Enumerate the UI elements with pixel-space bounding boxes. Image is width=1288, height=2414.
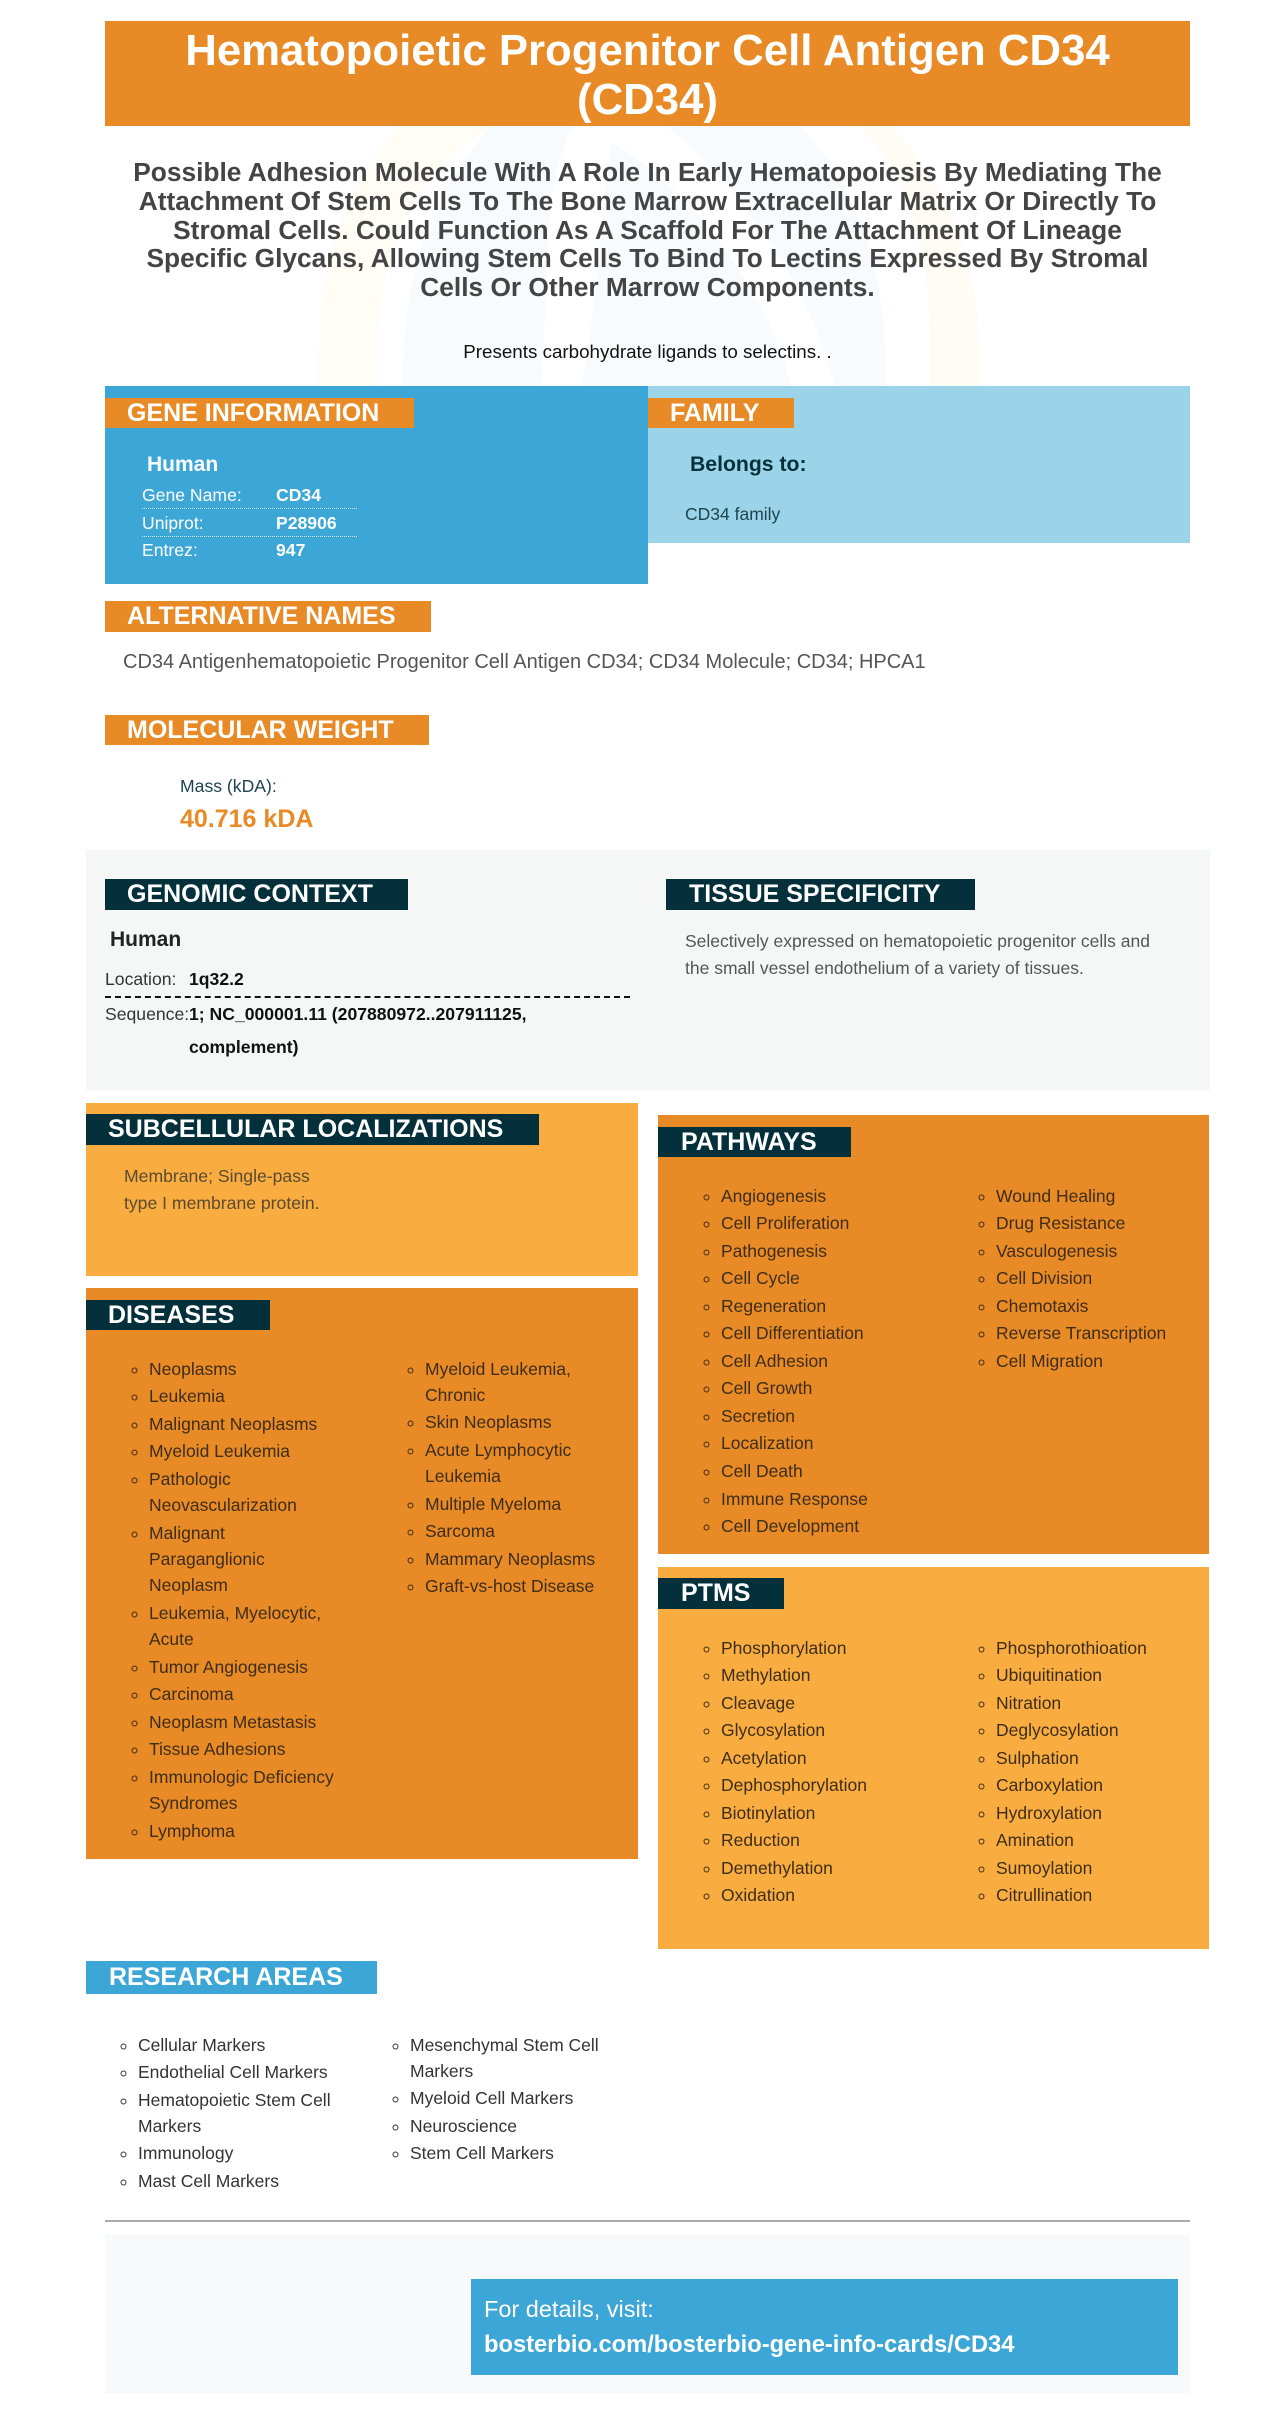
pathways list column 1: Cell Differentiation (721, 1323, 864, 1343)
diseases list column 1: Acute (149, 1629, 194, 1649)
pathways list column 1: Cell Development (721, 1516, 859, 1536)
tissue specificity text: Selectively expressed on hematopoietic progenitor cells and (685, 931, 1150, 951)
diseases list column 1: Paraganglionic (149, 1549, 265, 1569)
panel: footer (105, 2235, 1190, 2393)
sequence row: complement) (189, 1037, 298, 1057)
pathways list column 1: Immune Response (721, 1489, 868, 1509)
heading: ptms: PTMS (681, 1579, 750, 1607)
subtitle description: Specific Glycans, Allowing Stem Cells To Bind To Lectins Expressed By Stromal (147, 243, 1148, 273)
diseases list column 1: Neoplasms (149, 1358, 237, 1378)
diseases list column 1 (132, 1358, 334, 1841)
localization text (124, 1166, 320, 1213)
ptms list column 2: Nitration (996, 1693, 1061, 1713)
subtitle description: Attachment Of Stem Cells To The Bone Marrow Extracellular Matrix Or Directly To (139, 186, 1156, 216)
ptms list column 1: Demethylation (721, 1858, 833, 1878)
ptms list column 1: Cleavage (721, 1693, 795, 1713)
pathways list column 2 (978, 1186, 1166, 1371)
pathways list column 2: Cell Migration (996, 1351, 1103, 1371)
heading: genomic context: GENOMIC CONTEXT (127, 880, 373, 908)
pathways list column 1 (704, 1186, 868, 1536)
pathways list column 1: Regeneration (721, 1296, 826, 1316)
subtitle description: Cells Or Other Marrow Components. (420, 272, 875, 302)
ptms list column 2: Deglycosylation (996, 1720, 1119, 1740)
subtitle description: Stromal Cells. Could Function As A Scaffold For The Attachment Of Lineage (173, 215, 1122, 245)
title banner (105, 21, 1190, 126)
pathways list column 2: Drug Resistance (996, 1213, 1125, 1233)
ptms list column 1: Glycosylation (721, 1720, 825, 1740)
diseases list column 1: Carcinoma (149, 1684, 234, 1704)
species label: Human (147, 453, 218, 476)
ptms list column 2: Sulphation (996, 1748, 1079, 1768)
ptms list column 1: Dephosphorylation (721, 1775, 867, 1795)
ptms list column 1: Biotinylation (721, 1803, 815, 1823)
gene name row (142, 485, 357, 509)
panel: genomic context and tissue specificity: 1q32.2 (189, 969, 244, 989)
ptms list column 1: Acetylation (721, 1748, 807, 1768)
research areas list column 1: Endothelial Cell Markers (138, 2062, 328, 2082)
research areas list column 2: Mesenchymal Stem Cell (410, 2034, 599, 2054)
sequence row: Sequence: (105, 1004, 189, 1024)
callout: details link (471, 2279, 1178, 2375)
diseases list column 1: Malignant Neoplasms (149, 1414, 317, 1434)
alternative names text: CD34 Antigenhematopoietic Progenitor Cell Antigen CD34; CD34 Molecule; CD34; HPCA1 (123, 651, 926, 673)
diseases list column 1: Neoplasm Metastasis (149, 1712, 316, 1732)
details url: bosterbio.com/bosterbio-gene-info-cards/CD34 (484, 2332, 1014, 2358)
research areas list column 1 (120, 2034, 331, 2191)
pathways list column 1: Localization (721, 1433, 813, 1453)
gene name row: Gene Name: (142, 485, 242, 505)
pathways list column 1: Cell Growth (721, 1378, 812, 1398)
dashed divider (105, 996, 630, 998)
mass value: 40.716 kDA (180, 805, 313, 833)
ptms list column 2: Citrullination (996, 1885, 1092, 1905)
pathways list column 1: Cell Cycle (721, 1268, 800, 1288)
heading: molecular weight: MOLECULAR WEIGHT (127, 716, 394, 744)
research areas list column 1: Cellular Markers (138, 2034, 265, 2054)
research areas list column 1: Mast Cell Markers (138, 2171, 279, 2191)
diseases list column 1: Lymphoma (149, 1821, 235, 1841)
for details label: For details, visit: (484, 2296, 654, 2322)
heading: pathways: PATHWAYS (681, 1128, 817, 1156)
diseases list column 1: Leukemia (149, 1386, 225, 1406)
pathways list column 1: Cell Adhesion (721, 1351, 828, 1371)
belongs to label: Belongs to: (690, 453, 807, 476)
ptms list column 2 (978, 1638, 1147, 1905)
tissue specificity text: the small vessel endothelium of a variety of tissues. (685, 958, 1084, 978)
sequence row (105, 1004, 527, 1057)
family value: CD34 family (685, 504, 780, 524)
diseases list column 1: Pathologic (149, 1469, 231, 1489)
ptms list column 2: Ubiquitination (996, 1665, 1102, 1685)
function note: Presents carbohydrate ligands to selectins. . (463, 341, 832, 362)
heading: research areas: RESEARCH AREAS (109, 1963, 343, 1991)
ptms list column 2: Amination (996, 1830, 1074, 1850)
pathways list column 1: Angiogenesis (721, 1186, 826, 1206)
pathways list column 1: Cell Death (721, 1461, 803, 1481)
heading: research areas (86, 1961, 377, 1994)
research areas list column 2: Stem Cell Markers (410, 2143, 554, 2163)
heading: diseases (86, 1300, 270, 1330)
panel: alternative names (105, 601, 926, 673)
research areas list column 1: Immunology (138, 2143, 233, 2163)
heading: tissue specificity: TISSUE SPECIFICITY (689, 880, 940, 908)
ptms list column 2: Phosphorothioation (996, 1638, 1147, 1658)
background watermark logo (318, 126, 980, 386)
uniprot row: Uniprot: (142, 513, 204, 533)
pathways list column 2: Chemotaxis (996, 1296, 1088, 1316)
heading: ptms (658, 1578, 784, 1609)
diseases list column 2: Acute Lymphocytic (425, 1440, 571, 1460)
research areas list column 2 (392, 2034, 599, 2163)
diseases list column 1: Neovascularization (149, 1495, 297, 1515)
research areas list column 1: Hematopoietic Stem Cell (138, 2090, 331, 2110)
pathways list column 2: Wound Healing (996, 1186, 1115, 1206)
diseases list column 2: Chronic (425, 1385, 485, 1405)
diseases list column 2: Multiple Myeloma (425, 1494, 561, 1514)
gene name row: CD34 (276, 485, 321, 505)
diseases list column 1: Malignant (149, 1523, 225, 1543)
diseases list column 1: Tissue Adhesions (149, 1739, 286, 1759)
uniprot row (142, 513, 357, 537)
location row: Location: (105, 969, 176, 989)
localization text: type I membrane protein. (124, 1193, 320, 1213)
diseases list column 1: Tumor Angiogenesis (149, 1657, 308, 1677)
heading: pathways (658, 1127, 851, 1157)
research areas list column 2: Markers (410, 2061, 473, 2081)
panel: genomic context and tissue specificity (86, 850, 1210, 1090)
panel: family (648, 386, 1190, 543)
research areas list column 1: Markers (138, 2116, 201, 2136)
panel: subcellular localizations (86, 1103, 638, 1276)
heading: alternative names: ALTERNATIVE NAMES (127, 602, 396, 630)
heading: family: FAMILY (670, 399, 759, 427)
pathways list column 1: Cell Proliferation (721, 1213, 849, 1233)
diseases list column 2: Sarcoma (425, 1521, 495, 1541)
heading: family (648, 398, 794, 428)
diseases list column 2: Mammary Neoplasms (425, 1549, 595, 1569)
ptms list column 1 (704, 1638, 867, 1905)
research areas list column 2: Myeloid Cell Markers (410, 2088, 573, 2108)
localization text: Membrane; Single-pass (124, 1166, 310, 1186)
panel: research areas (86, 1961, 599, 2191)
diseases list column 1: Neoplasm (149, 1575, 228, 1595)
entrez row (142, 540, 305, 560)
diseases list column 1: Leukemia, Myelocytic, (149, 1603, 321, 1623)
pathways list column 1: Pathogenesis (721, 1241, 827, 1261)
pathways list column 2: Cell Division (996, 1268, 1092, 1288)
diseases list column 2: Leukemia (425, 1466, 501, 1486)
diseases list column 1: Immunologic Deficiency (149, 1767, 334, 1787)
pathways list column 1: Secretion (721, 1406, 795, 1426)
panel: ptms (658, 1567, 1209, 1949)
ptms list column 1: Methylation (721, 1665, 810, 1685)
title banner: Hematopoietic Progenitor Cell Antigen CD34 (185, 26, 1110, 75)
heading: subcellular localizations: SUBCELLULAR LOCALIZATIONS (108, 1115, 503, 1143)
ptms list column 2: Carboxylation (996, 1775, 1103, 1795)
research areas list column 2: Neuroscience (410, 2116, 517, 2136)
diseases list column 1: Syndromes (149, 1793, 238, 1813)
panel: pathways (658, 1115, 1209, 1554)
diseases list column 2: Myeloid Leukemia, (425, 1358, 571, 1378)
ptms list column 2: Sumoylation (996, 1858, 1092, 1878)
title banner: (CD34) (577, 75, 718, 124)
pathways list column 2: Vasculogenesis (996, 1241, 1117, 1261)
diseases list column 2: Graft-vs-host Disease (425, 1576, 594, 1596)
heading: diseases: DISEASES (108, 1301, 234, 1329)
subtitle description: Possible Adhesion Molecule With A Role In Early Hematopoiesis By Mediating The (133, 157, 1162, 187)
diseases list column 2 (408, 1358, 595, 1596)
ptms list column 1: Reduction (721, 1830, 800, 1850)
entrez row: Entrez: (142, 540, 198, 560)
ptms list column 1: Oxidation (721, 1885, 795, 1905)
subtitle description (133, 157, 1162, 302)
sequence row: 1; NC_000001.11 (207880972..207911125, (189, 1004, 527, 1024)
tissue specificity text (685, 931, 1150, 978)
pathways list column 2: Reverse Transcription (996, 1323, 1166, 1343)
entrez row: 947 (276, 540, 305, 560)
panel: molecular weight (105, 715, 429, 833)
uniprot row: P28906 (276, 513, 337, 533)
mass label: Mass (kDA): (180, 776, 277, 796)
diseases list column 2: Skin Neoplasms (425, 1412, 551, 1432)
heading: gene information: GENE INFORMATION (127, 399, 379, 427)
species label: Human (110, 928, 181, 951)
panel: diseases (86, 1288, 638, 1859)
location row (105, 969, 244, 989)
diseases list column 1: Myeloid Leukemia (149, 1441, 290, 1461)
ptms list column 2: Hydroxylation (996, 1803, 1102, 1823)
ptms list column 1: Phosphorylation (721, 1638, 846, 1658)
panel: gene information (105, 386, 648, 584)
